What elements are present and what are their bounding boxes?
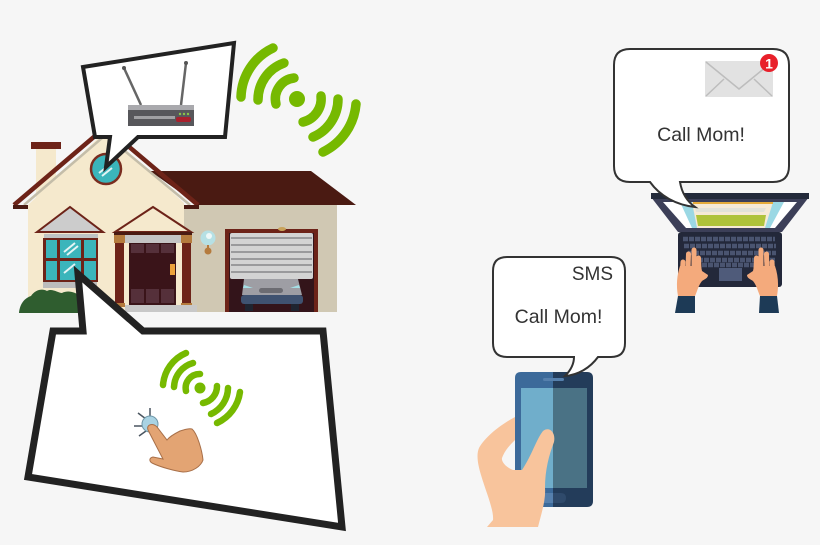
laptop lid and screen xyxy=(651,193,809,232)
house xyxy=(13,127,356,313)
icon: envelope with badge: 1 xyxy=(765,56,773,72)
SMS label: SMS xyxy=(572,264,613,285)
speech bubble: router xyxy=(83,43,234,167)
wall lamp xyxy=(200,230,216,254)
smartphone xyxy=(478,372,593,527)
icon: tapping hand xyxy=(134,408,203,472)
porch and front door xyxy=(114,207,197,312)
bush xyxy=(19,290,80,313)
icon: small wifi signal xyxy=(163,353,240,423)
icon: large wifi signal xyxy=(241,48,356,152)
phone body xyxy=(515,372,593,507)
right typing hand xyxy=(747,250,779,313)
chimney xyxy=(31,142,61,198)
laptop xyxy=(651,193,809,313)
SMS message text: Call Mom! xyxy=(515,306,602,328)
speech bubble: touch control xyxy=(28,274,342,527)
hand holding phone xyxy=(478,417,554,527)
left typing hand xyxy=(675,250,708,313)
laptop keyboard base xyxy=(678,232,782,287)
icon: envelope with badge xyxy=(705,54,778,97)
round attic window xyxy=(91,154,121,184)
garage door and car xyxy=(225,227,318,312)
icon: router xyxy=(122,61,194,126)
main house body xyxy=(13,127,199,312)
speech bubble: SMS xyxy=(493,257,625,376)
bay window xyxy=(37,207,103,288)
garage wing xyxy=(150,171,356,312)
speech bubble: laptop email xyxy=(614,49,789,207)
message text: Call Mom! xyxy=(657,124,745,146)
